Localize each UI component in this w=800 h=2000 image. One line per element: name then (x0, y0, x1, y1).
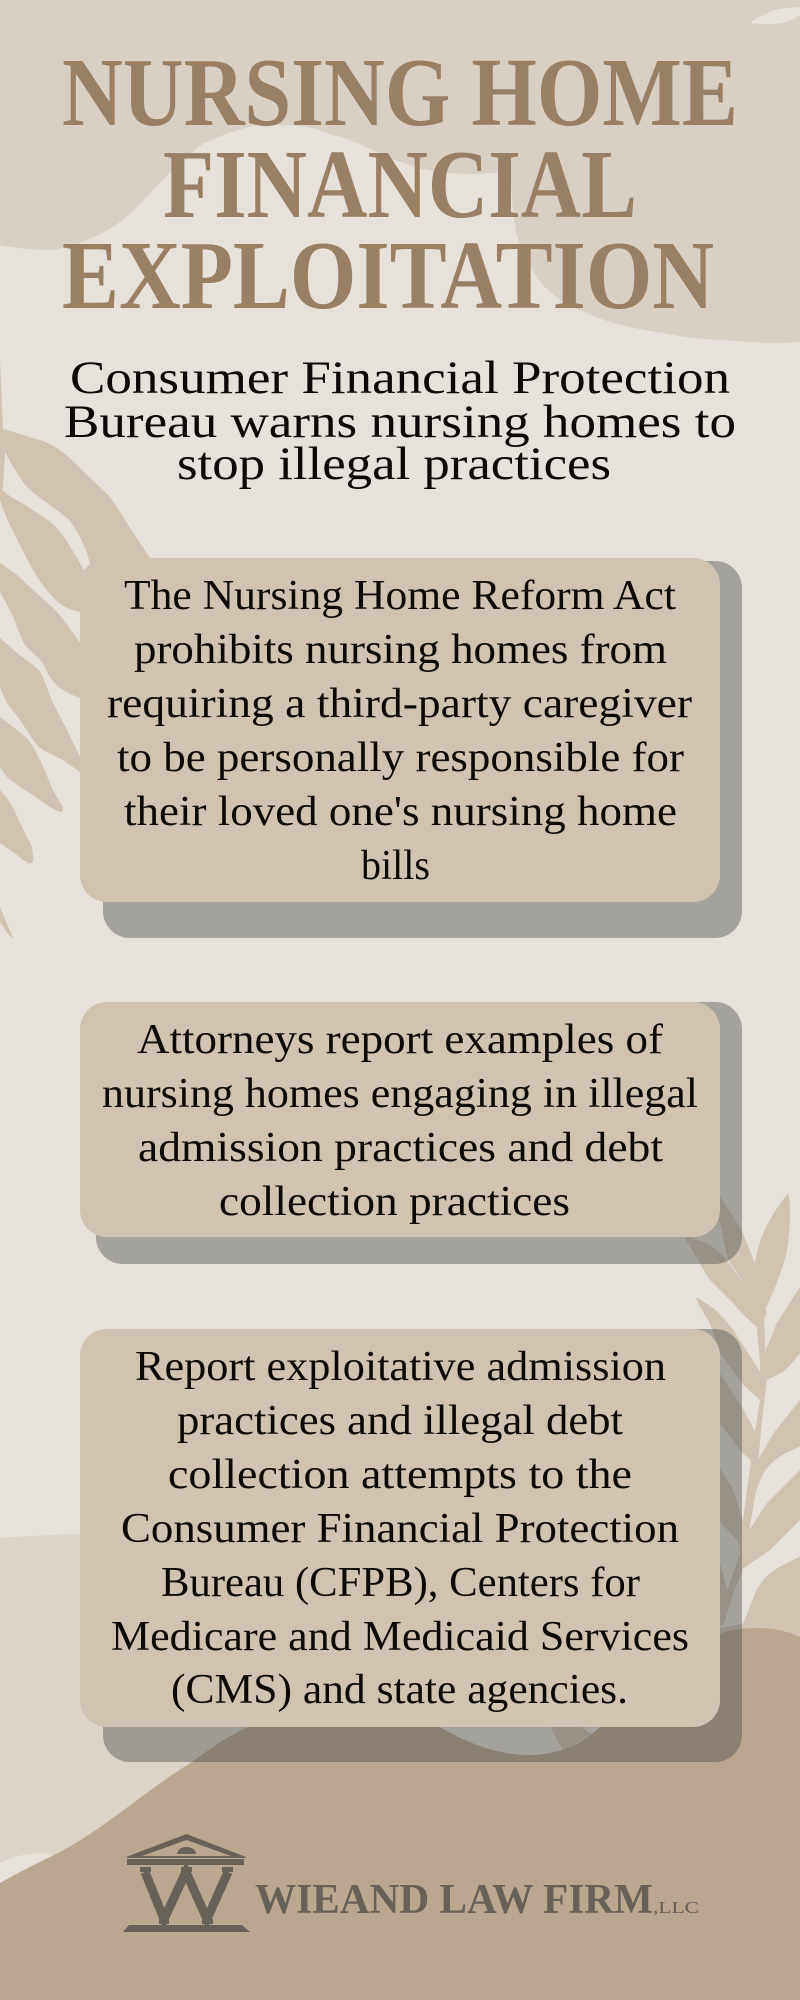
leaf branch: right (685, 1180, 800, 1647)
card text: nursing homes engaging in illegal (102, 1070, 698, 1117)
card text: practices and illegal debt (177, 1397, 623, 1444)
subtitle: Consumer Financial Protection (70, 352, 730, 404)
card shadow (103, 561, 742, 938)
background blob: lower left (0, 1533, 320, 1863)
card text (102, 1016, 698, 1225)
logo wordmark: WIEAND LAW FIRM (255, 1877, 653, 1923)
card text: admission practices and debt (138, 1124, 663, 1171)
icon: courthouse with W (123, 1834, 250, 1932)
background blob: top (0, 0, 800, 343)
card shadow (96, 1002, 742, 1264)
card text (111, 1343, 689, 1713)
card text: Bureau (CFPB), Centers for (161, 1559, 640, 1606)
card text: Report exploitative admission (135, 1343, 666, 1390)
subtitle: stop illegal practices (177, 438, 611, 490)
card text: requiring a third-party caregiver (107, 680, 692, 727)
card text: collection practices (219, 1178, 570, 1225)
card text: Consumer Financial Protection (121, 1505, 679, 1552)
title: FINANCIAL (163, 131, 637, 239)
card background (80, 558, 720, 902)
panel: report exploitative practices (80, 1329, 742, 1762)
logo: Wieand Law Firm (123, 1834, 699, 1932)
background blob: bottom (0, 1628, 800, 2000)
card background (80, 1002, 720, 1237)
card text: Attorneys report examples of (137, 1016, 664, 1063)
card shadow (103, 1329, 742, 1762)
card text: bills (361, 842, 430, 889)
title (62, 39, 738, 330)
subtitle (64, 352, 736, 490)
panel: nursing home reform act (80, 558, 742, 938)
card text: their loved one's nursing home (124, 788, 677, 835)
card text: The Nursing Home Reform Act (124, 572, 676, 619)
leaf branch: left (0, 360, 150, 940)
card text: Medicare and Medicaid Services (111, 1613, 689, 1660)
card text: to be personally responsible for (117, 734, 684, 781)
title: EXPLOITATION (62, 222, 714, 330)
panel: attorneys report (80, 1002, 742, 1264)
background small leaf fragment under card (550, 1727, 592, 1750)
card text: prohibits nursing homes from (134, 626, 667, 673)
card text (107, 572, 692, 889)
card background (80, 1329, 720, 1727)
subtitle: Bureau warns nursing homes to (64, 396, 736, 448)
card text: collection attempts to the (168, 1451, 632, 1498)
card text: (CMS) and state agencies. (171, 1666, 628, 1713)
logo suffix: ,LLC (653, 1898, 699, 1917)
background leaf: top right corner (750, 7, 800, 24)
